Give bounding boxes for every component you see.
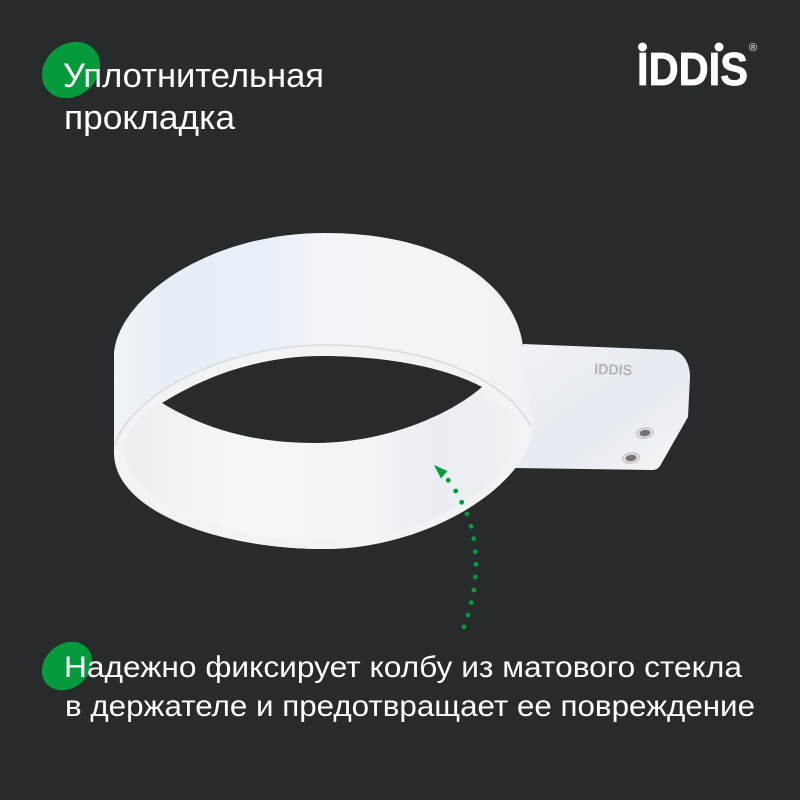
description text: Надежно фиксирует колбу из матового стекла	[64, 651, 742, 684]
ring inner surface	[124, 356, 519, 541]
dotted arrow	[434, 465, 478, 629]
title: прокладка	[64, 99, 235, 137]
logo: iDDIS: ®	[749, 42, 757, 54]
logo: iDDIS: IDDIS	[637, 43, 748, 95]
screw lower	[622, 452, 640, 464]
title accent blob	[31, 30, 111, 110]
description text: в держателе и предотвращает ее повреждение	[65, 690, 755, 723]
description text	[64, 651, 755, 723]
wall bracket	[515, 344, 690, 470]
bracket logo: IDDIS	[594, 361, 632, 379]
title	[63, 57, 324, 137]
glass ring outer band	[114, 233, 533, 549]
title: Уплотнительная	[63, 57, 324, 95]
description accent blob	[32, 632, 102, 700]
rim ridge line	[115, 345, 531, 445]
ring opening	[162, 356, 482, 443]
product: holder with ring	[114, 233, 690, 549]
screw upper	[636, 427, 654, 439]
gasket rim	[115, 345, 531, 549]
